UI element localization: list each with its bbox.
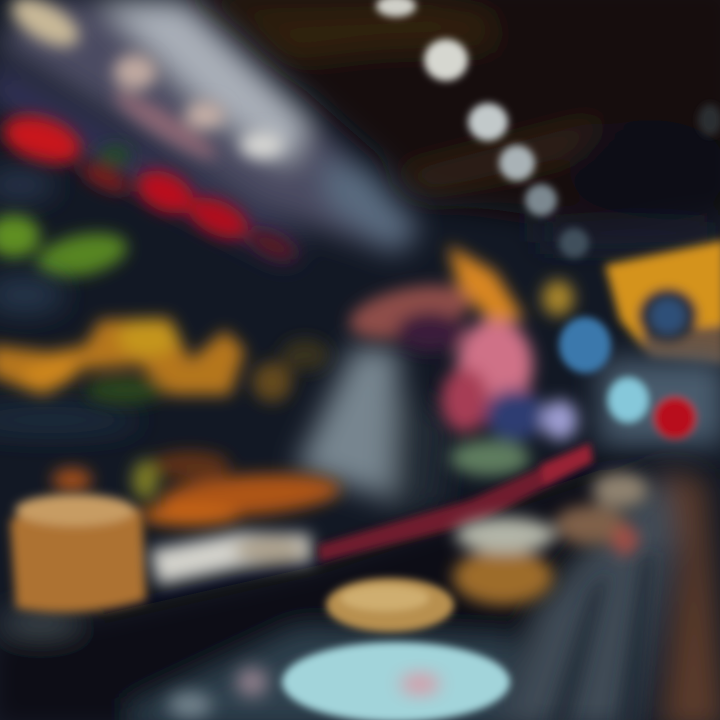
- foreground counter: [0, 470, 720, 720]
- maroon diagonal bar: [318, 443, 593, 562]
- shelf canopy: white diagonal band: [0, 0, 420, 262]
- tan pastry stack: [453, 472, 648, 605]
- white tray: [150, 532, 312, 585]
- yellow display panel: [605, 240, 720, 365]
- dark shelf tones: [0, 171, 140, 434]
- pink shopper: [344, 245, 578, 476]
- grey aisle figure: [295, 345, 450, 510]
- green produce: [0, 214, 131, 284]
- ceiling lights: [376, 0, 720, 258]
- orange dishes on shelf: [52, 451, 341, 526]
- red produce: [0, 107, 300, 266]
- ceiling: [180, 0, 720, 245]
- bread loaf: [326, 578, 454, 632]
- aisle floor stripes: [545, 550, 655, 720]
- canopy highlights: [3, 0, 284, 167]
- blue and red signs: [559, 317, 720, 445]
- orange and yellow produce: [0, 318, 329, 404]
- tan container: [10, 494, 146, 612]
- pale blue plate: [168, 642, 510, 720]
